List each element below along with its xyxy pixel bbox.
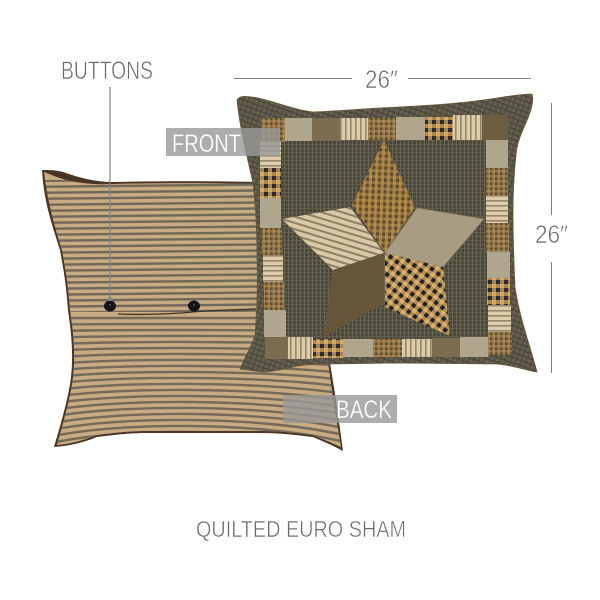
- star: right point: [385, 208, 484, 267]
- width dimension: 26″: [365, 66, 398, 94]
- label: buttons: BUTTONS: [61, 57, 153, 85]
- back pillow: button left: [104, 300, 116, 312]
- star: top point: [352, 140, 415, 253]
- front pillow: [237, 94, 537, 372]
- front pillow: patchwork left column: [260, 142, 286, 337]
- height dimension: 26″: [535, 221, 568, 249]
- back pillow: [40, 170, 345, 451]
- infographic: quilted euro sham: [42, 61, 568, 541]
- star: bottom right point: [385, 253, 450, 336]
- front pillow: quilted border: [237, 94, 537, 372]
- front pillow: patchwork right column: [486, 140, 512, 355]
- caption: QUILTED EURO SHAM: [196, 516, 406, 542]
- back pillow: button right: [188, 300, 200, 312]
- star: bottom left point: [323, 253, 384, 338]
- front pillow: center panel: [280, 140, 489, 339]
- back pillow: lower flap curved stripes: [50, 318, 345, 449]
- back pillow: flap slit: [118, 309, 256, 314]
- front pillow: patchwork bottom row: [265, 337, 488, 359]
- back pillow: fabric edge: [42, 170, 343, 451]
- label: back: [283, 395, 397, 424]
- front pillow: patchwork top row: [261, 115, 508, 142]
- leader line to button: [107, 87, 113, 301]
- label: back: BACK: [336, 396, 392, 424]
- star: left point: [282, 207, 384, 270]
- back pillow: ticking stripe fabric: [44, 172, 341, 447]
- label: front: FRONT: [172, 130, 241, 158]
- back pillow: upper stripes: [45, 180, 257, 312]
